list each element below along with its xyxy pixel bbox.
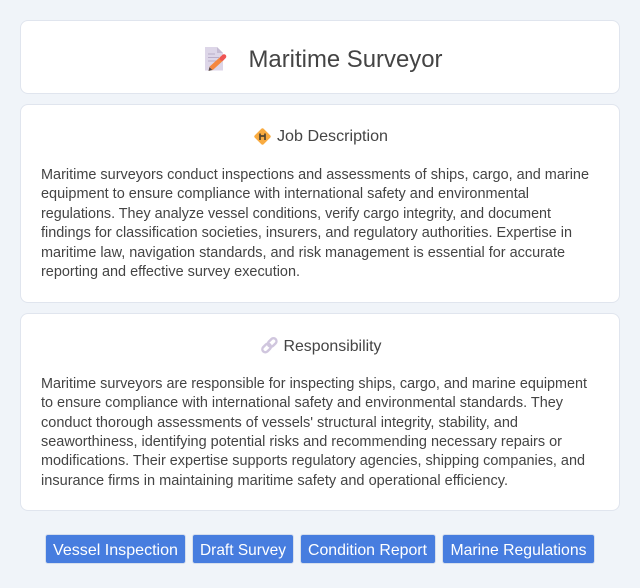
text block: responsibility: modifications. Their expertise supports regulatory agencies, shipping companies, and <box>41 453 585 469</box>
text block: responsibility: Maritime surveyors are responsible for inspecting ships, cargo, and marine equipment <box>41 376 587 392</box>
text block: responsibility <box>41 376 587 489</box>
text block: job description: maritime law, navigation standards, and risk management is essential for accurate <box>41 245 565 261</box>
tag: vessel inspection <box>45 534 186 564</box>
text block: responsibility: seaworthiness, identifying potential risks and recommending necessary repairs or <box>41 434 562 450</box>
text block: job description: equipment to ensure compliance with international safety and environmental <box>41 186 529 202</box>
text block: responsibility: insurance firms in maintaining maritime safety and operational efficiency. <box>41 473 508 489</box>
tag: draft survey <box>192 534 294 564</box>
icon: chain link <box>261 337 278 354</box>
text block: responsibility: to ensure compliance with international safety and environmental standards. They <box>41 395 564 411</box>
tag: marine regulations <box>442 534 595 564</box>
tag: draft survey: Draft Survey <box>200 542 286 559</box>
text block: responsibility: conduct thorough assessments of vessels' structural integrity, stability, and <box>41 415 518 431</box>
heading: responsibility: Responsibility <box>284 338 382 355</box>
tag: vessel inspection: Vessel Inspection <box>53 542 178 559</box>
tag: condition report <box>300 534 436 564</box>
tag: condition report: Condition Report <box>308 542 428 559</box>
title: Maritime Surveyor <box>248 46 442 73</box>
panel: responsibility <box>20 313 620 511</box>
panel: job description <box>20 104 620 303</box>
text block: job description: reporting and effective survey execution. <box>41 264 300 280</box>
icon: document with pencil <box>205 47 226 71</box>
tag: marine regulations: Marine Regulations <box>450 542 586 559</box>
text block: job description: findings for classification societies, insurers, and regulatory authorities. Expertise in <box>41 225 572 241</box>
panel: title card <box>20 20 620 94</box>
text block: job description <box>41 167 589 280</box>
icon: road sign diamond <box>254 128 271 145</box>
text block: job description: Maritime surveyors conduct inspections and assessments of ships, cargo, and marine <box>41 167 589 183</box>
text block: job description: regulations. They analyze vessel conditions, verify cargo integrity, and document <box>41 206 551 222</box>
heading: job description: Job Description <box>277 128 388 145</box>
